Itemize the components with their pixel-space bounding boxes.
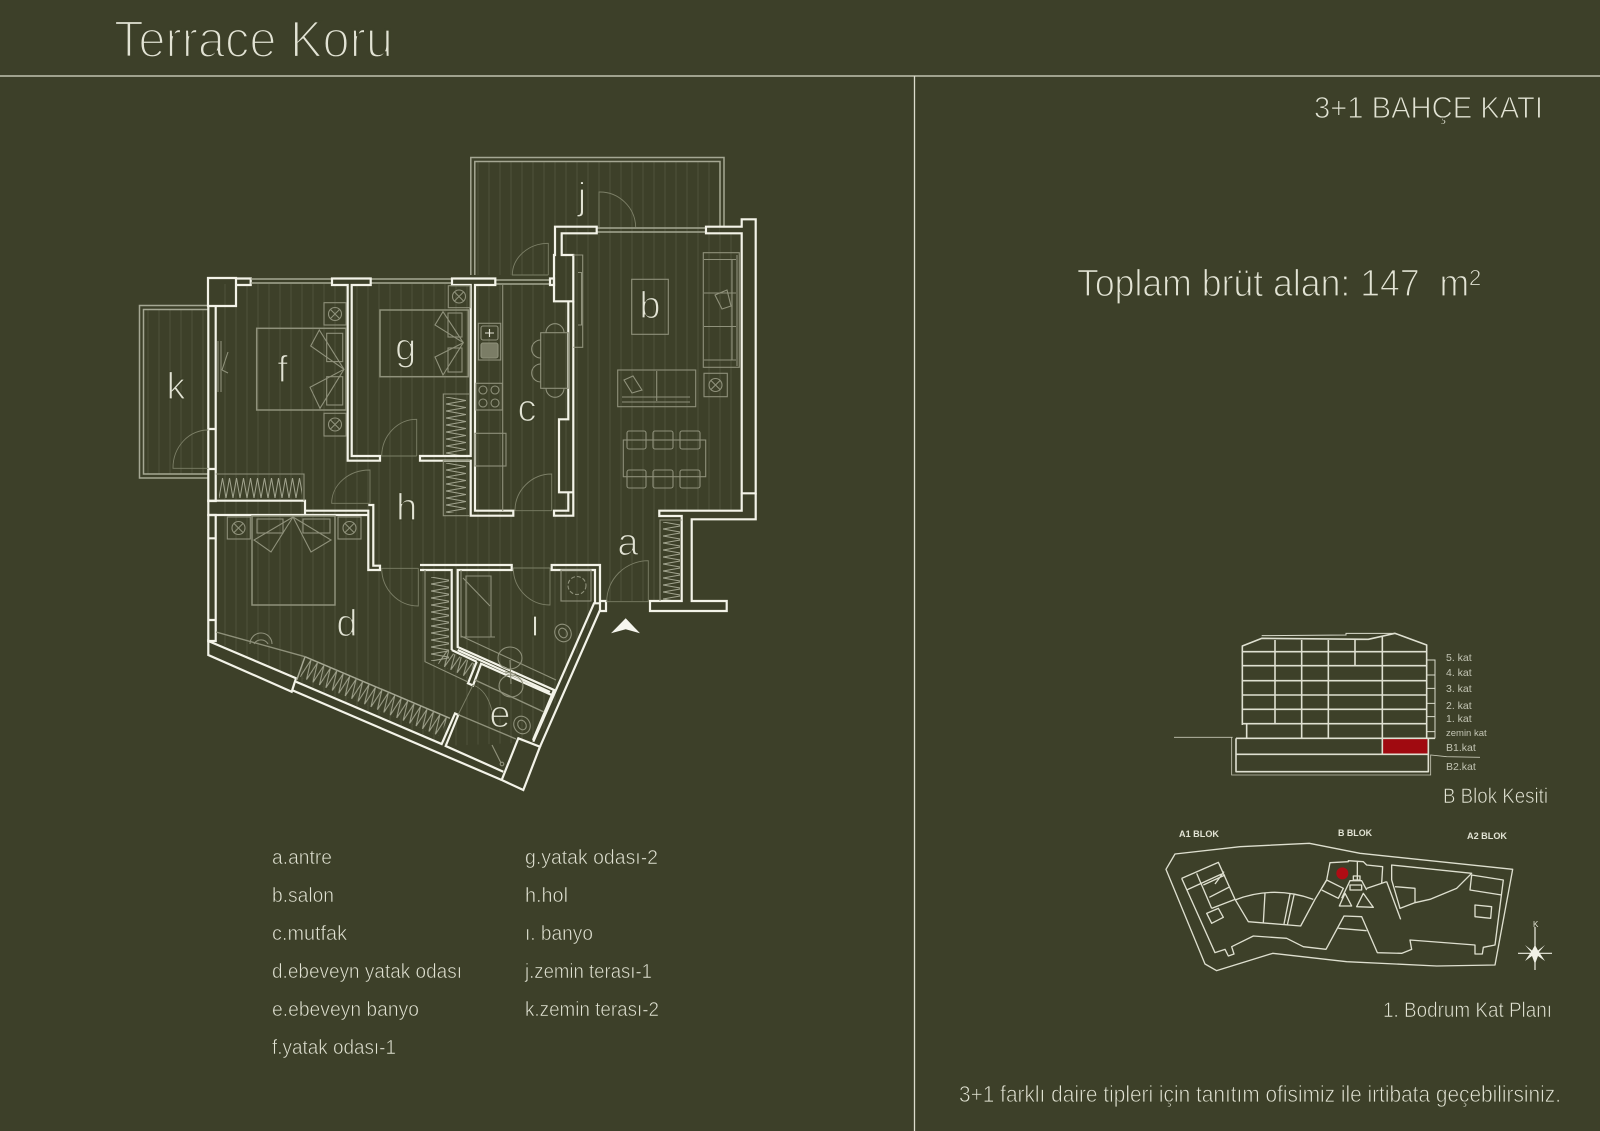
building floor labels: 1. kat <box>1446 713 1472 725</box>
legend left column: e.ebeveyn banyo <box>272 999 419 1021</box>
floor stripes <box>143 161 742 746</box>
legend left column: b.salon <box>272 885 334 907</box>
legend left column: a.antre <box>272 847 332 869</box>
compass <box>1518 920 1552 970</box>
room letters: j <box>577 176 586 218</box>
section caption: B Blok Kesiti <box>1443 785 1548 808</box>
terrace j outline <box>471 158 724 275</box>
building floor labels: 5. kat <box>1446 652 1472 664</box>
legend left column: d.ebeveyn yatak odası <box>272 961 462 983</box>
title: Terrace Koru <box>114 11 393 69</box>
building floor labels: B1.kat <box>1446 742 1476 754</box>
kitchen furniture <box>475 285 568 511</box>
bathroom fixtures <box>459 570 591 766</box>
building floor labels: B2.kat <box>1446 761 1476 773</box>
room letters: h <box>396 487 417 529</box>
room letters: f <box>277 349 288 391</box>
room letters: c <box>518 388 536 430</box>
room letters <box>166 176 661 736</box>
wardrobes <box>216 394 682 736</box>
legend left column: f.yatak odası-1 <box>272 1037 396 1059</box>
block labels: A1 BLOK <box>1179 829 1219 840</box>
room letters: d <box>336 603 358 645</box>
building floor labels: 3. kat <box>1446 683 1472 695</box>
building floor labels: 4. kat <box>1446 667 1472 679</box>
building floor labels: 2. kat <box>1446 700 1472 712</box>
block labels: A2 BLOK <box>1467 831 1507 842</box>
legend right column: h.hol <box>525 885 568 907</box>
site plan location marker <box>1336 867 1348 879</box>
legend right column: ı. banyo <box>525 923 593 945</box>
entrance arrow <box>611 618 640 633</box>
legend right column: k.zemin terası-2 <box>525 999 659 1021</box>
building section diagram <box>1174 633 1480 775</box>
bedroom f furniture <box>218 303 346 436</box>
room letters: ı <box>530 603 540 645</box>
site plan <box>1166 843 1513 971</box>
exterior and interior walls <box>208 219 756 790</box>
site plan caption: 1. Bodrum Kat Planı <box>1383 999 1552 1022</box>
building floor labels: zemin kat <box>1446 728 1487 739</box>
room letters: g <box>395 327 416 369</box>
bedroom g furniture <box>380 286 470 377</box>
floor plan <box>140 158 756 790</box>
total area: Toplam brüt alan: 147 m² <box>1077 263 1481 305</box>
building floor labels <box>1446 652 1487 773</box>
room letters: a <box>617 522 639 564</box>
doors <box>173 192 648 715</box>
compass: K <box>1533 920 1539 929</box>
living room furniture <box>573 253 739 488</box>
room letters: b <box>639 285 661 327</box>
apartment type heading: 3+1 BAHÇE KATI <box>1314 90 1543 125</box>
legend right column: g.yatak odası-2 <box>525 847 658 869</box>
room letters: e <box>489 694 511 736</box>
legend right column: j.zemin terası-1 <box>524 961 652 983</box>
legend left column <box>272 847 462 1059</box>
legend right column <box>524 847 659 1021</box>
terrace k outline <box>140 306 208 478</box>
legend left column: c.mutfak <box>272 923 348 945</box>
block labels: B BLOK <box>1338 828 1372 839</box>
bedroom d furniture <box>216 516 361 657</box>
block labels <box>1179 828 1507 842</box>
room letters: k <box>166 366 186 408</box>
